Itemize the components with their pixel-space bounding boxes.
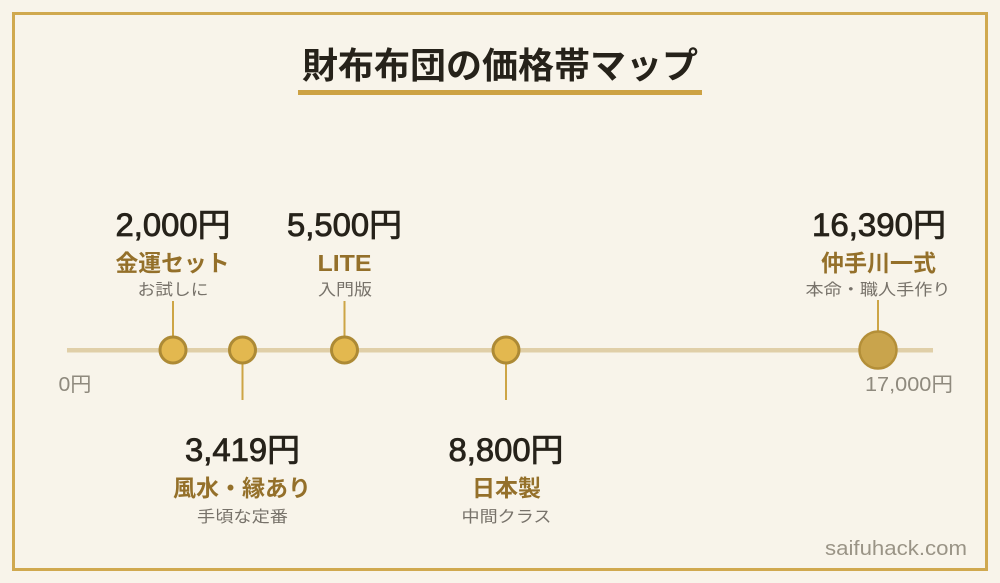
marker: 日本製: 8,800円 (448, 432, 564, 468)
marker: 風水・縁あり (173, 337, 311, 526)
marker: 金運セット: お試しに (138, 281, 208, 299)
title underline (298, 90, 702, 95)
axis label: maximum: 17,000円 (865, 374, 953, 396)
marker: 金運セット: 金運セット (116, 250, 230, 276)
price axis (67, 348, 933, 352)
marker: 仲手川一式: 仲手川一式 (821, 250, 936, 276)
marker: LITE: 5,500円 (287, 207, 402, 243)
marker: 風水・縁あり: 3,419円 (185, 432, 300, 468)
marker: LITE: 入門版 (318, 281, 372, 299)
marker: 日本製: 日本製 (472, 475, 541, 501)
marker: LITE: LITE (318, 250, 372, 276)
marker: 風水・縁あり: 風水・縁あり (173, 475, 311, 501)
marker: 風水・縁あり: 手頃な定番 (197, 508, 288, 526)
marker: 仲手川一式: 16,390円 (812, 207, 946, 243)
marker: 仲手川一式: 本命・職人手作り (806, 281, 950, 299)
marker: 仲手川一式 (806, 207, 950, 368)
site credit: saifuhack.com (825, 537, 967, 560)
marker: 金運セット (116, 207, 230, 363)
marker: 日本製 (448, 337, 564, 526)
marker: LITE (287, 207, 402, 363)
axis label: minimum: 0円 (58, 374, 92, 396)
title: 財布布団の価格帯マップ (302, 45, 698, 86)
marker: 金運セット: 2,000円 (116, 207, 230, 243)
marker: 日本製: 中間クラス (462, 508, 552, 526)
